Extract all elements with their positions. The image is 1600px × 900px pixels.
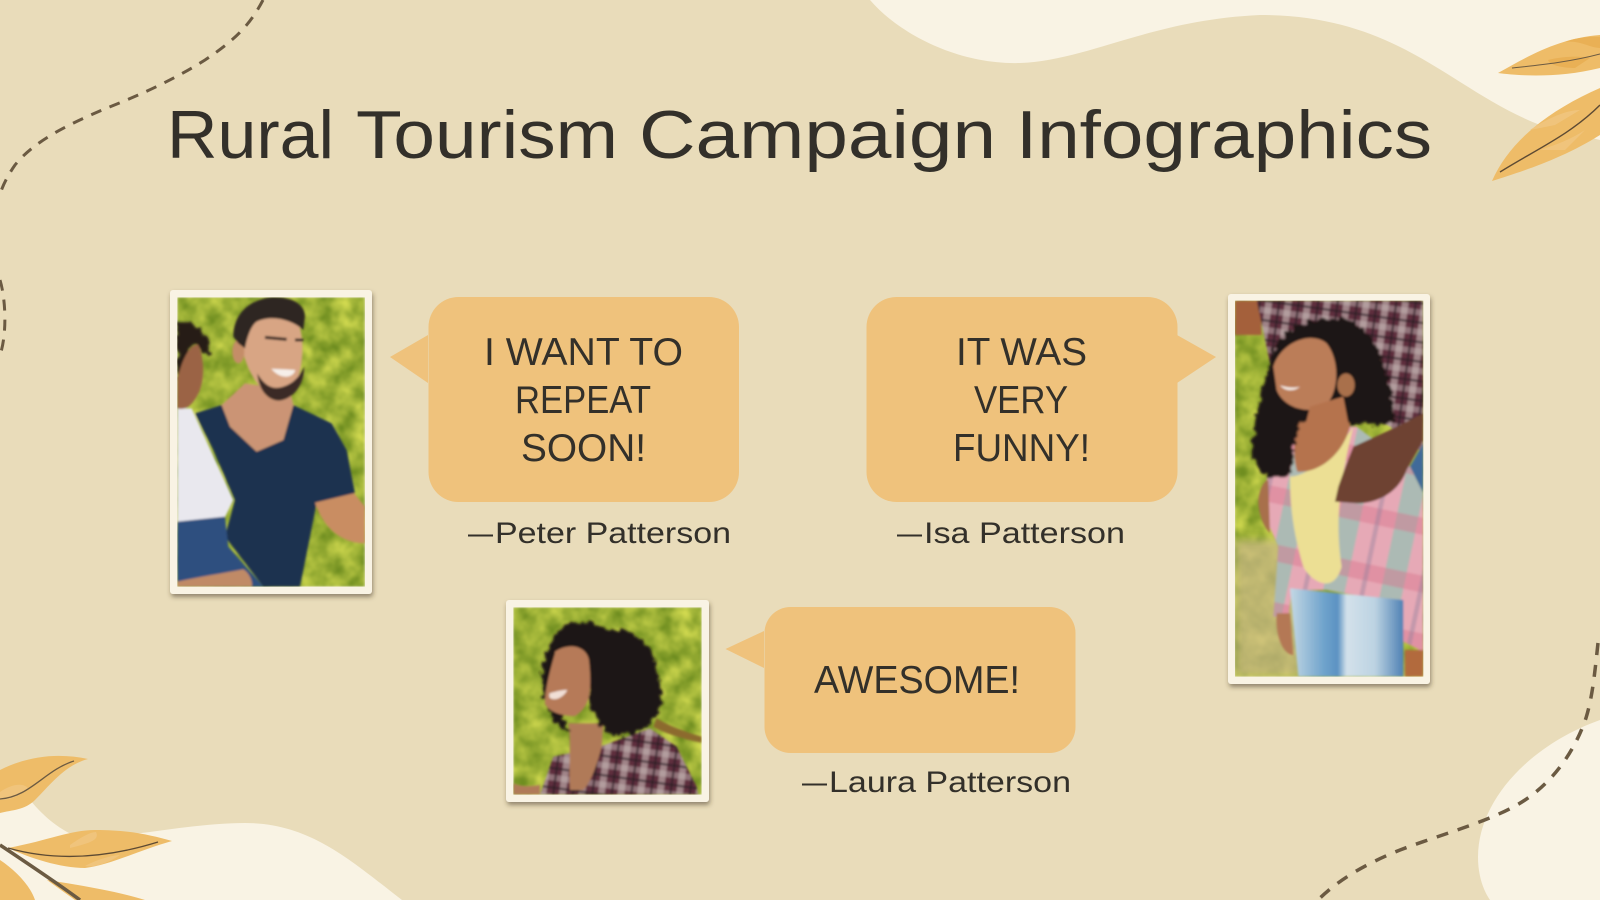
photo: man carrying child xyxy=(170,290,372,594)
speech bubble: Peter xyxy=(390,297,739,502)
quote text: it was very funny: VERY xyxy=(974,379,1068,422)
quote text: I want to repeat soon: I WANT TO xyxy=(484,331,683,374)
attribution: Isa Patterson: Isa Patterson xyxy=(924,517,1125,550)
title: Tourism xyxy=(356,97,618,173)
quote text: awesome: AWESOME! xyxy=(814,659,1020,702)
attribution: Laura Patterson: Laura Patterson xyxy=(829,766,1071,799)
icon: leaves bottom left xyxy=(0,756,172,900)
decoration: top right cream blob xyxy=(870,0,1600,140)
speech bubble: Isa xyxy=(866,297,1216,502)
decoration: dashed arc left xyxy=(0,280,5,355)
decoration: bottom left cream blob xyxy=(0,770,402,900)
attribution: Isa Patterson: — xyxy=(897,517,922,550)
photo: woman with curly hair xyxy=(506,600,709,802)
title: Rural xyxy=(167,97,334,173)
photo: girl looking up xyxy=(1228,294,1430,684)
title: Campaign xyxy=(639,97,996,173)
decoration: dashed line top left xyxy=(0,0,263,194)
attribution: Laura Patterson: — xyxy=(802,766,827,799)
decoration: bottom right cream blob xyxy=(1478,720,1600,900)
attribution: Peter Patterson: Peter Patterson xyxy=(495,517,731,550)
quote text: it was very funny: FUNNY! xyxy=(953,427,1090,470)
quote text: it was very funny: IT WAS xyxy=(956,331,1087,374)
quote text: I want to repeat soon: SOON! xyxy=(521,427,646,470)
icon: leaves top right xyxy=(1492,35,1600,181)
quote text: I want to repeat soon: REPEAT xyxy=(515,379,651,422)
speech bubble: Laura xyxy=(726,607,1076,753)
title xyxy=(167,97,1432,173)
attribution: Peter Patterson: — xyxy=(468,517,493,550)
quote text: it was very funny xyxy=(953,331,1090,470)
quote text: I want to repeat soon xyxy=(484,331,683,470)
title: Infographics xyxy=(1016,97,1432,173)
decoration: dashed line bottom right xyxy=(1318,643,1598,900)
